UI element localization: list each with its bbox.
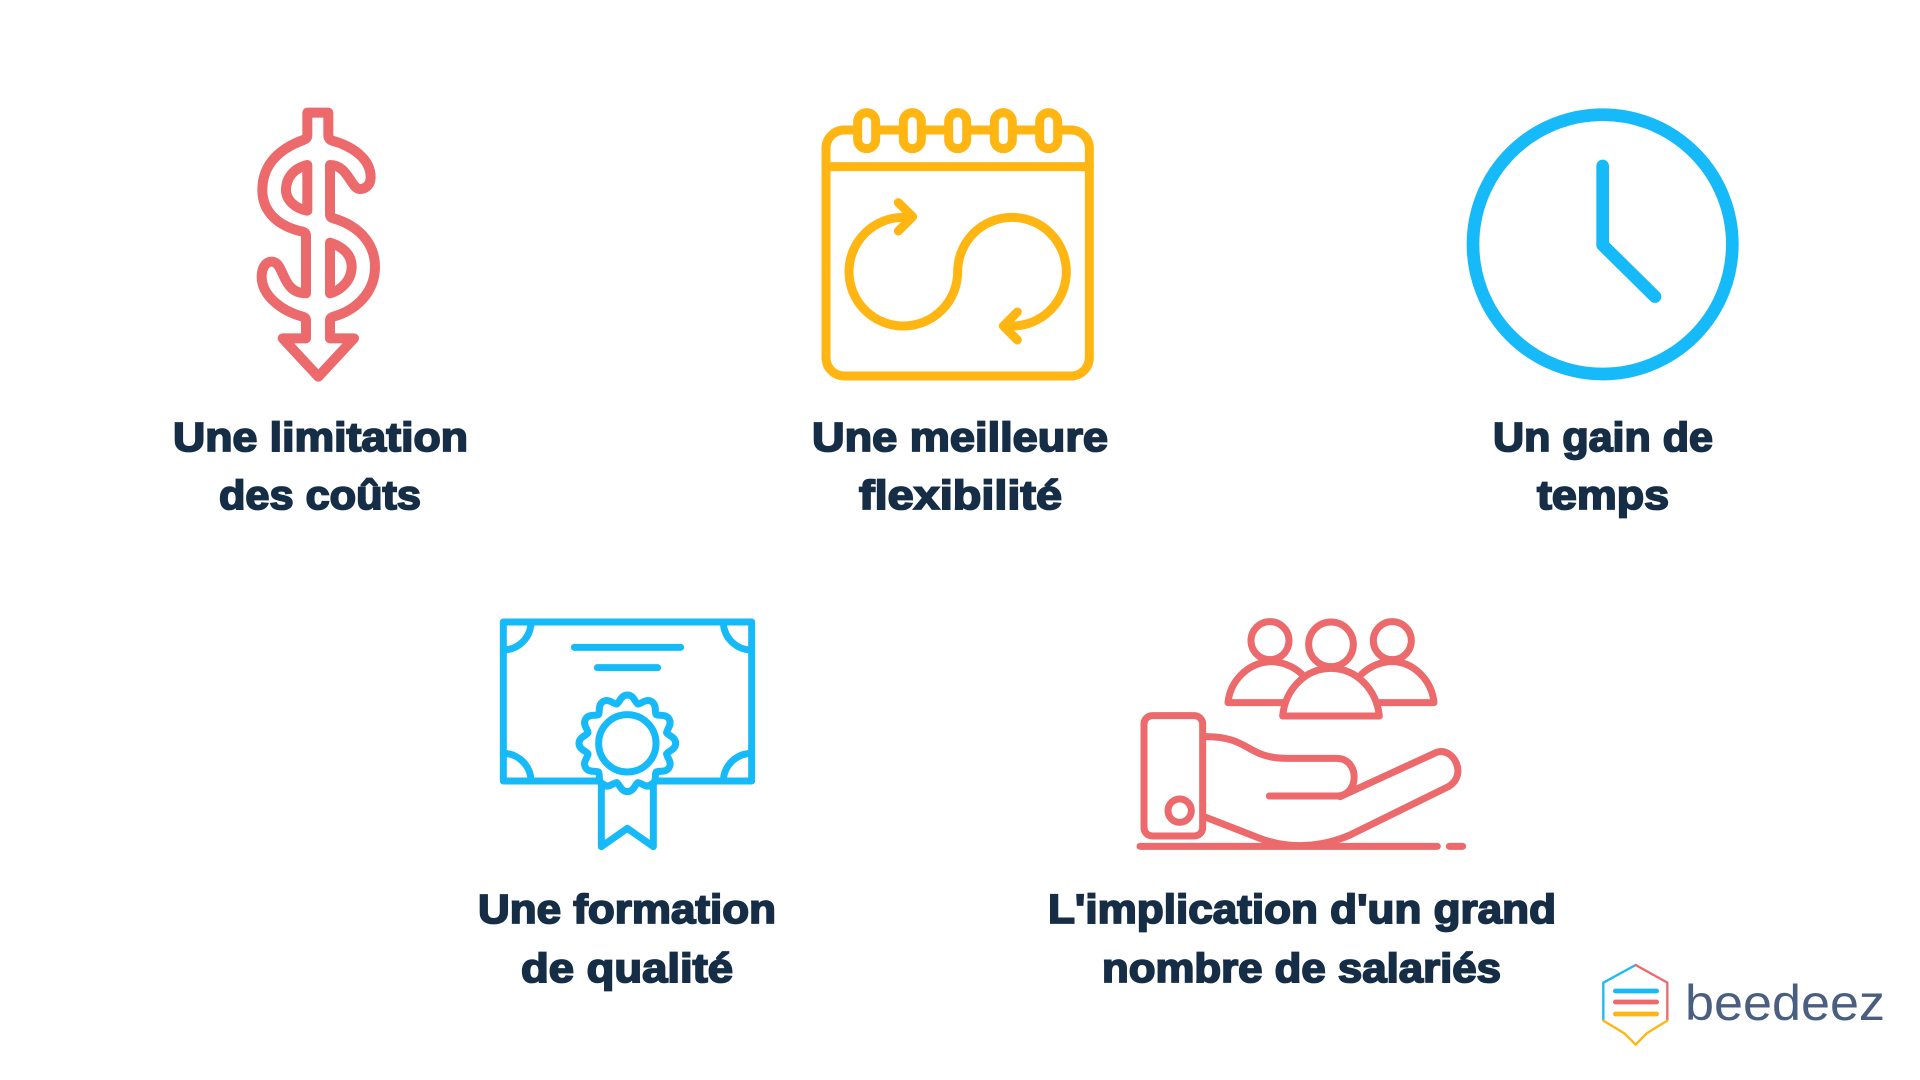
heading: limitation des coûts [173,414,468,518]
heading: formation de qualité: Une formation [478,886,776,932]
heading: gain de temps: temps [1537,472,1669,518]
heading: implication des salariés [1048,886,1556,991]
heading: implication des salariés: L'implication d'un grand [1048,886,1556,932]
heading: limitation des coûts: des coûts [219,472,421,518]
icon: dollar with down arrow [262,113,375,377]
heading: limitation des coûts: Une limitation [173,414,468,460]
heading: meilleure flexibilité: Une meilleure [812,414,1108,460]
logo: beedeez [1603,965,1885,1045]
heading: implication des salariés: nombre de salariés [1102,945,1501,991]
heading: meilleure flexibilité [812,414,1108,518]
icon: calendar with flexible loop arrows [826,113,1089,376]
heading: gain de temps: Un gain de [1493,414,1713,460]
heading: formation de qualité [478,886,776,991]
heading: gain de temps [1493,414,1713,518]
heading: meilleure flexibilité: flexibilité [859,472,1062,518]
icon: logo hexagon [1603,965,1667,1045]
logo wordmark: beedeez [1685,975,1885,1031]
icon: clock [1473,115,1732,374]
icon: hand holding group of people [1140,622,1463,846]
icon: certificate with seal [503,622,752,847]
heading: formation de qualité: de qualité [521,945,733,991]
